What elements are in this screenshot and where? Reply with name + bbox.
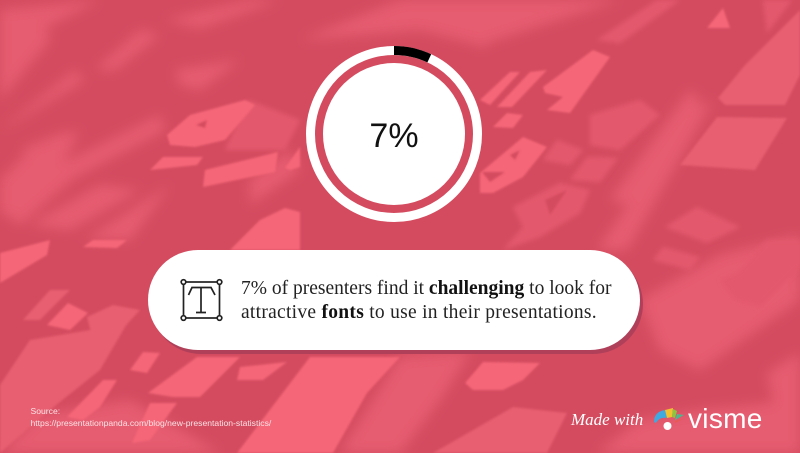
ring progress: 7 percent (394, 50, 429, 58)
icon: visme logo (654, 408, 684, 430)
callout text: 7% of presenters find it challenging to look for (241, 278, 611, 299)
callout pill shadow (151, 254, 643, 354)
callout text (241, 278, 612, 323)
source note (30, 406, 272, 428)
value label: 7% (369, 117, 419, 155)
icon: font T in frame (180, 278, 223, 322)
inner white disc (323, 63, 465, 205)
callout text: attractive fonts to use in their presentations. (241, 302, 597, 323)
source note: Source: (30, 406, 60, 416)
source note: https://presentationpanda.com/blog/new-presentation-statistics/ (30, 418, 271, 428)
callout pill (148, 250, 640, 350)
made with label: Made with (571, 410, 643, 429)
ring track (310, 50, 478, 218)
donut chart: 7% (306, 46, 482, 222)
visme wordmark: visme (688, 403, 763, 434)
